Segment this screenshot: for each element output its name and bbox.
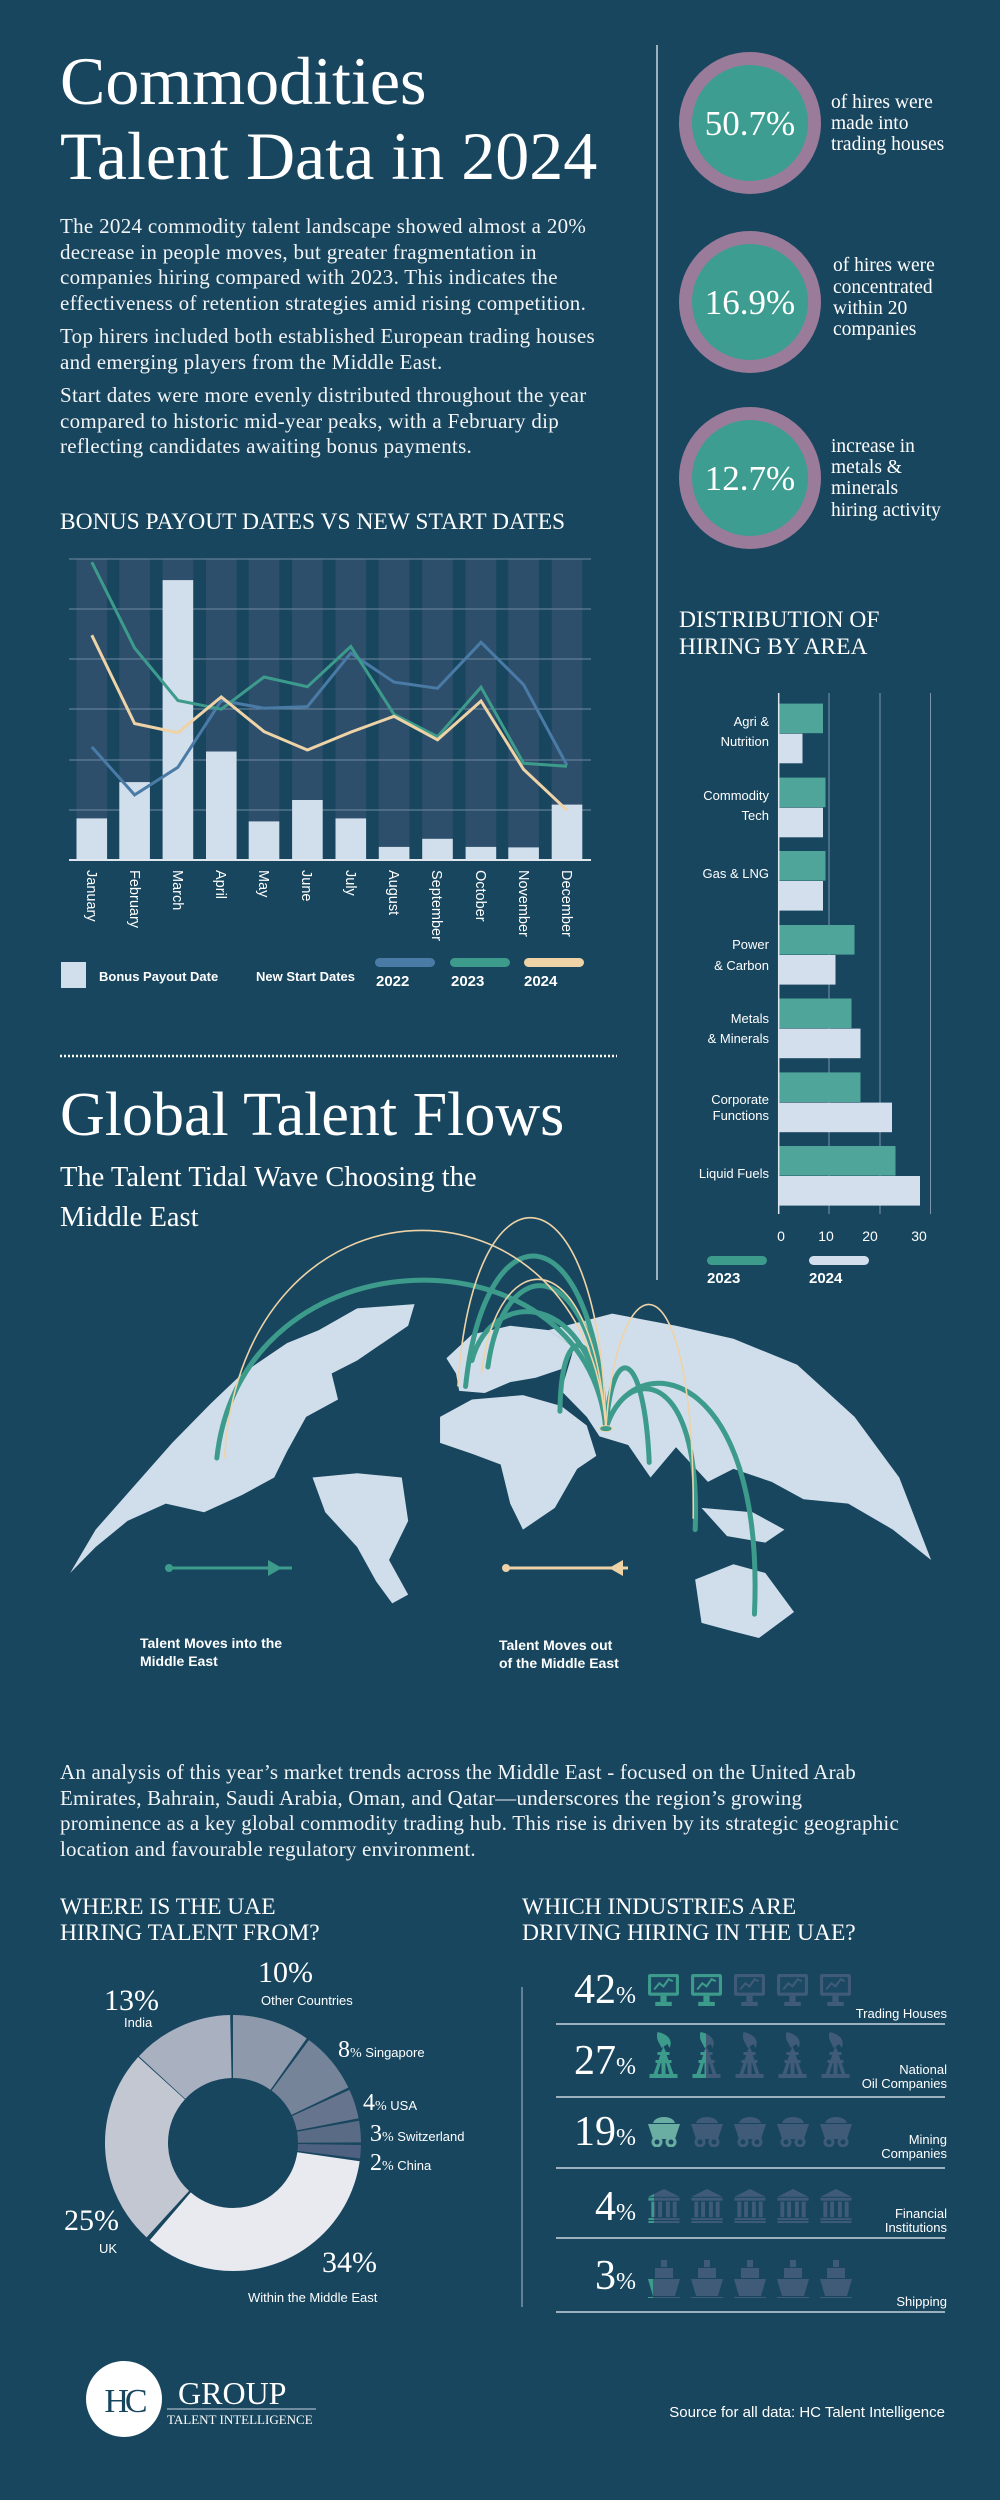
industries pictogram: 19% [574, 2109, 636, 2155]
stat circle: 12.7%: increase in [831, 436, 915, 457]
bar chart legend [707, 1256, 869, 1287]
industries pictogram: Shipping [896, 2294, 947, 2309]
bar chart: hiring by area [699, 693, 930, 1244]
line/bar chart: bonus payout vs start dates: April [212, 870, 228, 899]
bar chart: hiring by area: Power [732, 937, 770, 952]
line/bar chart: bonus payout vs start dates: August [385, 870, 401, 915]
donut chart: Other Countries [261, 1993, 353, 2008]
industries pictogram: 27% [574, 2038, 636, 2084]
heading: distribution by area [679, 607, 879, 660]
industries pictogram: 3% [595, 2253, 636, 2299]
industries pictogram: National [899, 2062, 947, 2077]
stat circle: 50.7%: 50.7% [705, 104, 795, 143]
analysis paragraph: Emirates, Bahrain, Saudi Arabia, Oman, and Qatar—underscores the region’s growing [60, 1786, 802, 1810]
intro text: companies hiring compared with 2023. This indicates the [60, 265, 558, 289]
donut chart: India [124, 2015, 153, 2030]
line/bar chart: bonus payout vs start dates: July [342, 870, 358, 897]
subheading: Middle East [60, 1202, 199, 1233]
bar chart: hiring by area: Agri & [734, 714, 769, 729]
chart legend: 2023 [451, 973, 484, 990]
title: Talent Data in 2024 [60, 118, 597, 194]
bar chart: hiring by area: Gas & LNG [703, 866, 769, 881]
heading: distribution by area: HIRING BY AREA [679, 634, 867, 660]
heading: distribution by area: DISTRIBUTION OF [679, 607, 879, 633]
donut chart: 25% [64, 2204, 119, 2237]
stat circle: 12.7%: 12.7% [705, 459, 795, 498]
world map with flows [70, 1216, 932, 1638]
donut chart: 4% USA [363, 2090, 417, 2116]
industries pictogram: Financial [895, 2206, 947, 2221]
line/bar chart: bonus payout vs start dates [69, 559, 591, 941]
heading: where UAE hires from [60, 1894, 320, 1946]
bar chart: hiring by area: 30 [911, 1228, 927, 1244]
legend: moves out of ME: of the Middle East [499, 1655, 619, 1671]
chart legend: New Start Dates [256, 969, 355, 984]
dotted divider [60, 1055, 617, 1057]
bar chart legend: 2024 [809, 1270, 843, 1287]
stat circle: 50.7%: of hires were [831, 92, 933, 113]
stat circle: 12.7%: hiring activity [831, 500, 941, 521]
line/bar chart: bonus payout vs start dates: January [83, 870, 99, 922]
line/bar chart: bonus payout vs start dates: December [558, 870, 574, 937]
bar chart: hiring by area: Tech [742, 808, 769, 823]
title [60, 43, 597, 194]
intro text: The 2024 commodity talent landscape showed almost a 20% [60, 214, 586, 238]
legend: moves into ME: Talent Moves into the [140, 1635, 282, 1651]
stat circle: 12.7%: minerals [831, 478, 898, 499]
bar chart: hiring by area: & Carbon [714, 958, 769, 973]
heading: where UAE hires from: WHERE IS THE UAE [60, 1894, 276, 1920]
subheading: The Talent Tidal Wave Choosing the [60, 1162, 477, 1193]
bar chart: hiring by area: Corporate [711, 1092, 769, 1107]
donut chart: UK [99, 2241, 117, 2256]
row icons [648, 1974, 852, 2298]
heading: industries driving hiring: DRIVING HIRING IN THE UAE? [522, 1920, 856, 1946]
bar chart: hiring by area: Liquid Fuels [699, 1166, 769, 1181]
line/bar chart: bonus payout vs start dates: November [515, 870, 531, 937]
donut chart: 34% [322, 2246, 377, 2279]
industries pictogram [522, 1967, 947, 2312]
bar chart: hiring by area: Commodity [703, 788, 769, 803]
heading: global talent flows: Global Talent Flows [60, 1081, 564, 1149]
subheading [60, 1162, 477, 1233]
analysis paragraph: prominence as a key global commodity trading hub. This rise is driven by its strategic geographic [60, 1811, 899, 1835]
bar chart legend: 2023 [707, 1270, 740, 1287]
chart legend: 2024 [524, 973, 558, 990]
donut chart: 10% [258, 1956, 313, 1989]
stat circle: 16.9% [686, 238, 935, 366]
donut chart: Within the Middle East [248, 2290, 378, 2305]
stat circle: 16.9%: of hires were [833, 255, 935, 276]
donut chart: 8% Singapore [338, 2037, 425, 2063]
logo [86, 2361, 316, 2437]
donut chart: 2% China [370, 2150, 432, 2176]
heading: industries driving hiring: WHICH INDUSTRIES ARE [522, 1894, 796, 1920]
analysis paragraph [60, 1760, 899, 1860]
line/bar chart: bonus payout vs start dates: March [169, 870, 185, 910]
bar chart: hiring by area: & Minerals [708, 1031, 769, 1046]
industries pictogram: Companies [881, 2146, 947, 2161]
legend: moves out of ME [499, 1560, 628, 1671]
intro text: and emerging players from the Middle East. [60, 350, 443, 374]
line/bar chart: bonus payout vs start dates: February [126, 870, 142, 929]
bar chart: hiring by area: Nutrition [721, 734, 769, 749]
heading: where UAE hires from: HIRING TALENT FROM? [60, 1920, 320, 1946]
heading: industries driving hiring [522, 1894, 856, 1946]
vertical divider [656, 45, 658, 1280]
stat circle: 50.7% [686, 58, 944, 188]
bar chart: hiring by area: Metals [731, 1011, 769, 1026]
donut chart [64, 1956, 464, 2305]
analysis paragraph: An analysis of this year’s market trends across the Middle East - focused on the United Arab [60, 1760, 856, 1784]
industries pictogram: Mining [909, 2132, 947, 2147]
intro text: effectiveness of retention strategies amid rising competition. [60, 290, 586, 314]
legend: moves out of ME: Talent Moves out [499, 1637, 613, 1653]
line/bar chart: bonus payout vs start dates: June [298, 870, 314, 901]
legend: moves into ME: Middle East [140, 1653, 218, 1669]
donut chart: 13% [104, 1984, 159, 2017]
intro text: decrease in people moves, but greater fragmentation in [60, 240, 537, 264]
stat circle: 16.9%: 16.9% [705, 283, 795, 322]
stat circle: 12.7%: metals & [831, 457, 902, 478]
title: Commodities [60, 43, 426, 119]
stat circle: 16.9%: companies [833, 319, 916, 340]
chart legend: 2022 [376, 973, 409, 990]
bar chart: hiring by area: 0 [777, 1228, 785, 1244]
intro text: reflecting candidates awaiting bonus payments. [60, 434, 472, 458]
legend: moves into ME [140, 1560, 292, 1669]
industries pictogram: Oil Companies [862, 2076, 947, 2091]
logo: GROUP [178, 2375, 286, 2411]
industries pictogram: 4% [595, 2184, 636, 2230]
analysis paragraph: location and favourable regulatory environment. [60, 1836, 476, 1860]
industries pictogram: Trading Houses [856, 2006, 947, 2021]
intro text: Top hirers included both established European trading houses [60, 324, 595, 348]
bar chart: hiring by area: Functions [713, 1108, 769, 1123]
stat circle: 12.7% [686, 414, 941, 542]
stat circle: 16.9%: concentrated [833, 277, 933, 298]
line/bar chart: bonus payout vs start dates: October [472, 870, 488, 922]
line/bar chart: bonus payout vs start dates: September [428, 870, 444, 941]
donut chart: 3% Switzerland [370, 2121, 464, 2147]
stat circle: 50.7%: trading houses [831, 134, 944, 155]
bar chart: hiring by area: 10 [818, 1228, 834, 1244]
stat circle: 50.7%: made into [831, 113, 908, 134]
logo: TALENT INTELLIGENCE [167, 2412, 313, 2427]
industries pictogram: 42% [574, 1967, 636, 2013]
bar chart: hiring by area: 20 [862, 1228, 878, 1244]
heading: bonus payout chart: BONUS PAYOUT DATES VS NEW START DATES [60, 509, 565, 535]
chart legend [61, 958, 584, 990]
industries pictogram: Institutions [885, 2220, 947, 2235]
line/bar chart: bonus payout vs start dates: May [255, 870, 271, 898]
stat circle: 16.9%: within 20 [833, 298, 907, 319]
intro text [60, 214, 595, 458]
intro text: compared to historic mid-year peaks, with a February dip [60, 408, 559, 432]
source note: Source for all data: HC Talent Intelligence [669, 2404, 945, 2421]
logo: HC [104, 2383, 146, 2420]
chart legend: Bonus Payout Date [99, 969, 218, 984]
intro text: Start dates were more evenly distributed throughout the year [60, 383, 587, 407]
